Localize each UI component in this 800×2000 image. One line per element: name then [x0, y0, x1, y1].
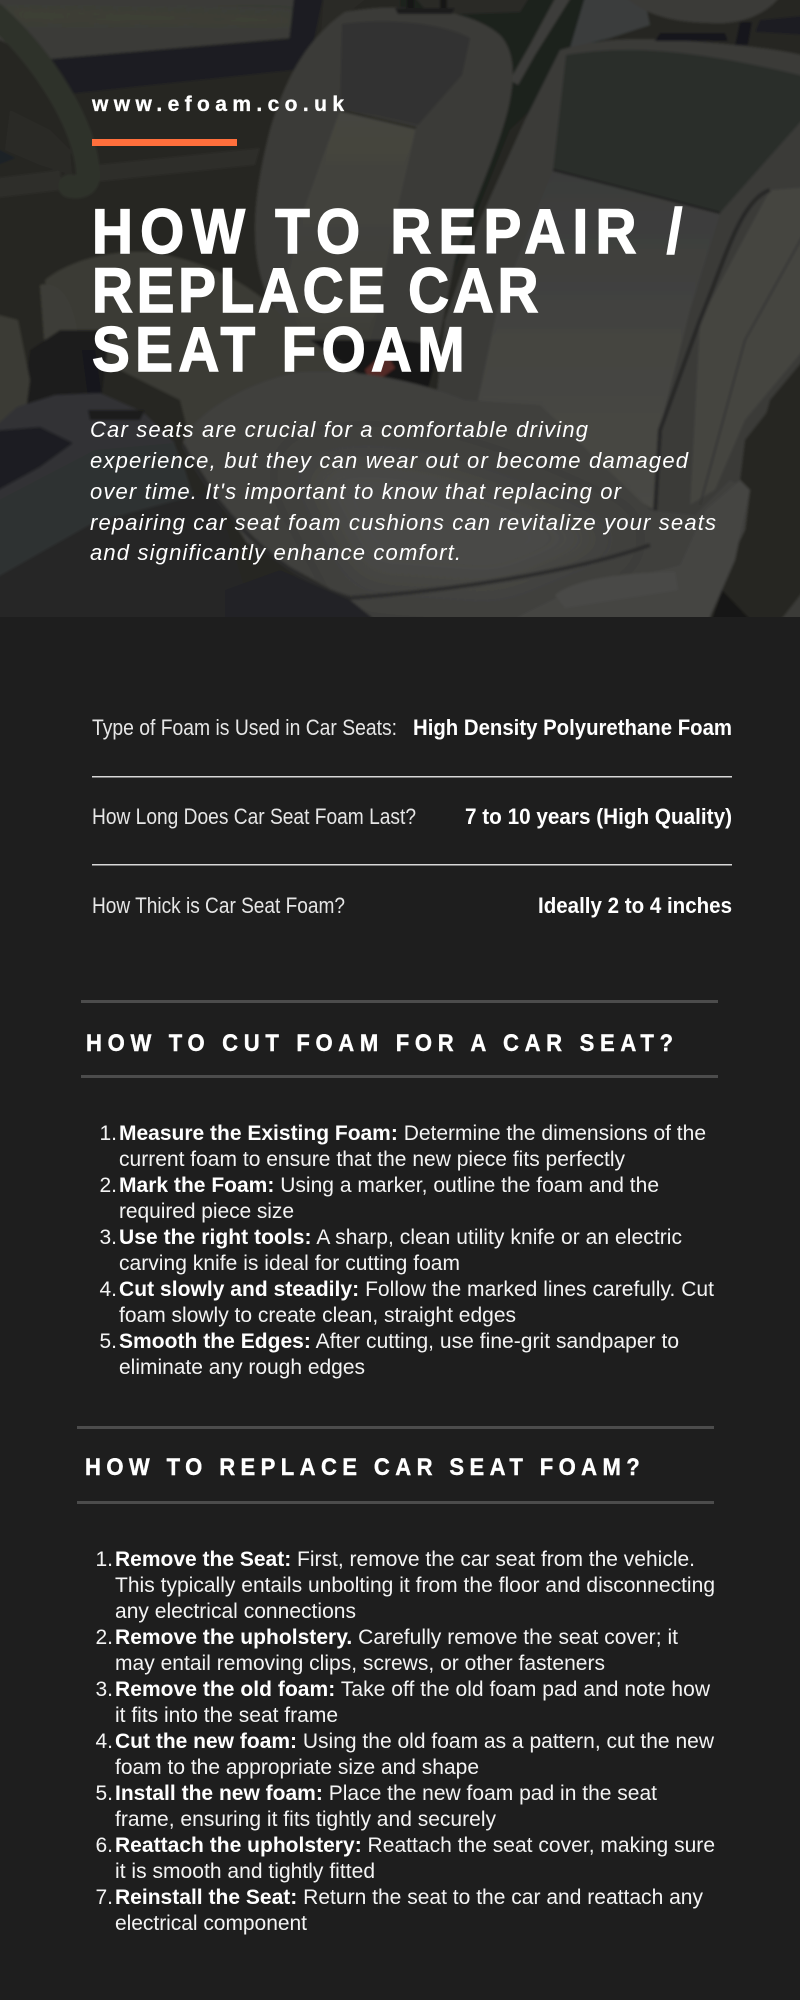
passenger seat back — [435, 39, 800, 530]
numbered list: replace foam steps: 2. — [95, 1626, 113, 1649]
numbered list: replace foam steps: This typically entails unbolting it from the floor and disconnecting — [115, 1574, 715, 1597]
hero photo: car seats — [0, 0, 800, 640]
numbered list: cut foam steps: eliminate any rough edges — [119, 1356, 365, 1379]
fact: type of foam: Type of Foam is Used in Car Seats: — [92, 715, 397, 740]
intro paragraph: and significantly enhance comfort. — [90, 540, 461, 565]
numbered list: replace foam steps: foam to the appropriate size and shape — [115, 1756, 479, 1779]
numbered list: cut foam steps: foam slowly to create clean, straight edges — [119, 1304, 516, 1327]
fact: foam lifespan: 7 to 10 years (High Quality) — [465, 804, 732, 829]
numbered list: replace foam steps: 7. — [95, 1886, 113, 1909]
numbered list: replace foam steps: 5. — [95, 1782, 113, 1805]
numbered list: cut foam steps — [99, 1122, 714, 1379]
panel: hero — [0, 0, 800, 640]
numbered list: replace foam steps: 4. — [95, 1730, 113, 1753]
numbered list: cut foam steps: Mark the Foam: Using a marker, outline the foam and the — [119, 1174, 659, 1197]
intro paragraph — [90, 417, 716, 565]
cushion — [183, 371, 750, 640]
panel: how to replace foam — [77, 1426, 715, 1935]
fact: type of foam — [92, 715, 732, 740]
fact: foam thickness: Ideally 2 to 4 inches — [538, 893, 732, 918]
website url: www.efoam.co.uk — [91, 93, 344, 116]
numbered list: replace foam steps: any electrical connections — [115, 1600, 356, 1623]
numbered list: cut foam steps: Use the right tools: A sharp, clean utility knife or an electric — [119, 1226, 682, 1249]
numbered list: cut foam steps: 3. — [99, 1226, 117, 1249]
numbered list: replace foam steps: 6. — [95, 1834, 113, 1857]
numbered list: cut foam steps: 5. — [99, 1330, 117, 1353]
numbered list: replace foam steps: Reattach the upholstery: Reattach the seat cover, making sure — [115, 1834, 715, 1857]
fact: type of foam: High Density Polyurethane Foam — [413, 715, 732, 740]
fact: foam lifespan — [92, 804, 732, 829]
numbered list: replace foam steps: 3. — [95, 1678, 113, 1701]
fact: foam thickness — [92, 893, 732, 918]
numbered list: cut foam steps: 1. — [99, 1122, 117, 1145]
fact: foam thickness: How Thick is Car Seat Foam? — [92, 893, 345, 918]
numbered list: replace foam steps: electrical component — [115, 1912, 307, 1935]
orange accent bar — [92, 139, 237, 146]
numbered list: cut foam steps: Smooth the Edges: After cutting, use fine-grit sandpaper to — [119, 1330, 679, 1353]
panel: quick facts — [92, 715, 732, 918]
numbered list: replace foam steps: frame, ensuring it fits tightly and securely — [115, 1808, 496, 1831]
numbered list: replace foam steps: Install the new foam: Place the new foam pad in the seat — [115, 1782, 657, 1805]
numbered list: cut foam steps: 2. — [99, 1174, 117, 1197]
numbered list: cut foam steps: current foam to ensure that the new piece fits perfectly — [119, 1148, 626, 1171]
numbered list: cut foam steps: carving knife is ideal for cutting foam — [119, 1252, 460, 1275]
title: REPLACE CAR — [92, 255, 538, 326]
numbered list: replace foam steps — [95, 1548, 715, 1935]
heading: replace foam: HOW TO REPLACE CAR SEAT FOAM? — [85, 1453, 640, 1480]
numbered list: cut foam steps: Measure the Existing Foam: Determine the dimensions of the — [119, 1122, 706, 1145]
title: HOW TO REPAIR / — [92, 196, 683, 267]
numbered list: replace foam steps: 1. — [95, 1548, 113, 1571]
intro paragraph: experience, but they can wear out or become damaged — [90, 448, 689, 473]
dark floor right — [740, 416, 766, 485]
intro paragraph: repairing car seat foam cushions can revitalize your seats — [90, 510, 716, 535]
numbered list: cut foam steps: 4. — [99, 1278, 117, 1301]
numbered list: replace foam steps: Remove the Seat: First, remove the car seat from the vehicle. — [115, 1548, 695, 1571]
headrest — [644, 0, 777, 24]
numbered list: replace foam steps: it fits into the seat frame — [115, 1704, 338, 1727]
numbered list: replace foam steps: Cut the new foam: Using the old foam as a pattern, cut the new — [115, 1730, 715, 1753]
numbered list: replace foam steps: Reinstall the Seat: Return the seat to the car and reattach any — [115, 1886, 704, 1909]
driver seat back — [255, 7, 513, 400]
title: SEAT FOAM — [92, 314, 465, 385]
numbered list: cut foam steps: required piece size — [119, 1200, 294, 1223]
numbered list: replace foam steps: it is smooth and tightly fitted — [115, 1860, 375, 1883]
numbered list: replace foam steps: may entail removing clips, screws, or other fasteners — [115, 1652, 605, 1675]
floor and console — [0, 444, 192, 576]
intro paragraph: over time. It's important to know that replacing or — [90, 479, 623, 504]
intro paragraph: Car seats are crucial for a comfortable driving — [90, 417, 589, 442]
heading: cut foam: HOW TO CUT FOAM FOR A CAR SEAT? — [86, 1029, 673, 1056]
numbered list: cut foam steps: Cut slowly and steadily: Follow the marked lines carefully. Cut — [119, 1278, 714, 1301]
fact: foam lifespan: How Long Does Car Seat Foam Last? — [92, 804, 416, 829]
driver cushion — [45, 252, 310, 430]
title — [92, 196, 683, 385]
numbered list: replace foam steps: Remove the upholstery. Carefully remove the seat cover; it — [115, 1626, 678, 1649]
numbered list: replace foam steps: Remove the old foam: Take off the old foam pad and note how — [115, 1678, 711, 1701]
panel: how to cut foam — [81, 1000, 718, 1379]
